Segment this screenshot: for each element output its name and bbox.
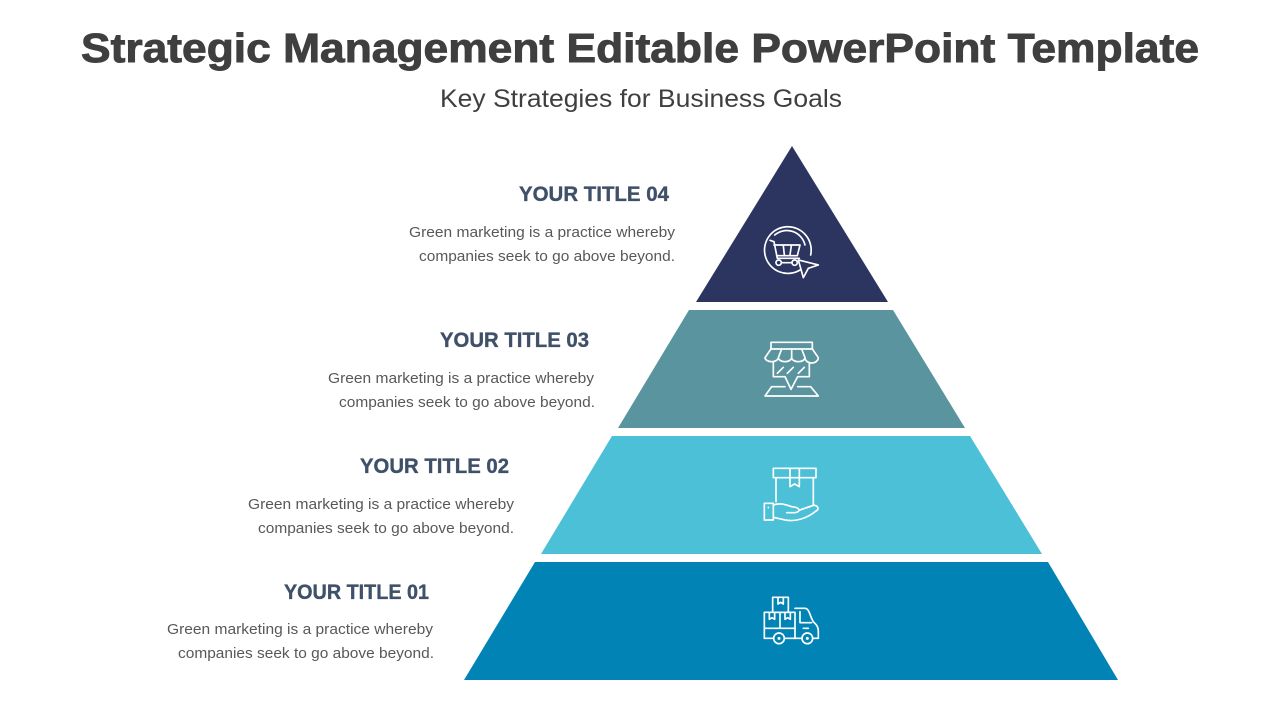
icon: shopping cart with cursor: [765, 227, 818, 278]
icon: storefront: [765, 342, 818, 396]
text block: title 03: YOUR TITLE 03: [440, 329, 589, 352]
subtitle: Key Strategies for Business Goals: [440, 85, 842, 113]
icon: delivery truck with boxes: [764, 597, 818, 644]
pyramid tier 02: [541, 436, 1042, 554]
text block: title 04: YOUR TITLE 04: [519, 183, 669, 206]
text block: title 03: Green marketing is a practice whereby: [328, 370, 595, 387]
text block: title 03: companies seek to go above beyond.: [339, 394, 595, 411]
pyramid tier 01: [464, 562, 1118, 680]
icon: box on open hand: [764, 468, 818, 521]
pyramid tier 03: [618, 310, 965, 428]
text block: title 02: companies seek to go above beyond.: [258, 520, 514, 537]
text block: title 01: Green marketing is a practice whereby: [167, 621, 434, 638]
text block: title 04: [409, 183, 676, 265]
text block: title 02: Green marketing is a practice whereby: [248, 496, 515, 513]
title: Strategic Management Editable PowerPoint Template: [81, 25, 1199, 71]
text block: title 04: companies seek to go above beyond.: [419, 248, 675, 265]
pyramid tier 04: [696, 146, 888, 302]
text block: title 02: [248, 455, 515, 537]
text block: title 01: companies seek to go above beyond.: [178, 645, 434, 662]
text block: title 03: [328, 329, 595, 411]
text block: title 01: YOUR TITLE 01: [284, 581, 429, 604]
text block: title 01: [167, 581, 434, 662]
text block: title 04: Green marketing is a practice whereby: [409, 224, 676, 241]
text block: title 02: YOUR TITLE 02: [360, 455, 509, 478]
